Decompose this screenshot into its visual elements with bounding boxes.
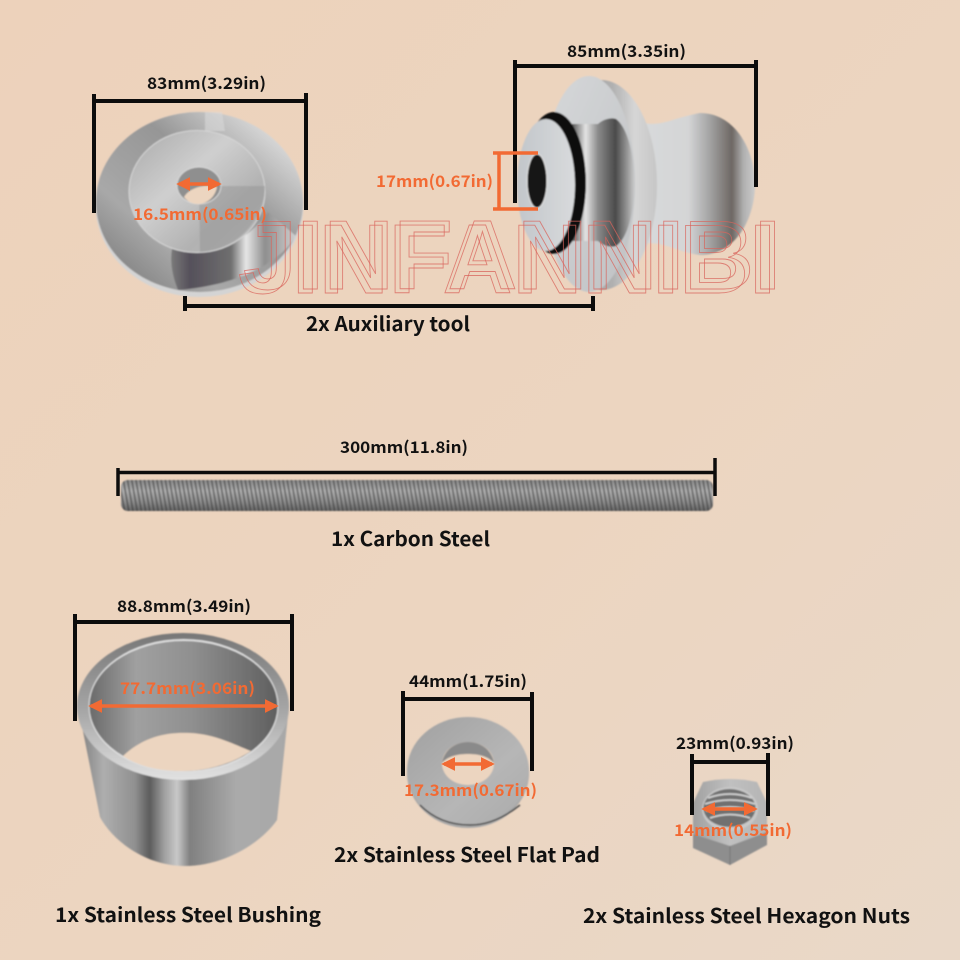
label: carbon steel: 1x Carbon Steel	[331, 523, 490, 552]
dimension: auxiliary tool span	[185, 296, 593, 311]
label: bushing: 1x Stainless Steel Bushing	[55, 899, 321, 928]
dimension: bushing outer	[75, 593, 292, 721]
panel: hexagon nut	[583, 730, 910, 929]
washer	[407, 717, 529, 828]
label: hexagon nuts: 2x Stainless Steel Hexagon Nuts	[583, 900, 910, 929]
dimension: disc outer width: 83mm(3.29in)	[147, 70, 266, 94]
label: auxiliary tool: 2x Auxiliary tool	[306, 308, 470, 337]
dimension: nut outer	[676, 730, 794, 816]
spool body	[517, 76, 755, 292]
dimension: washer outer	[403, 668, 532, 776]
panel: flat pad	[334, 668, 600, 868]
dimension: spool width: 85mm(3.35in)	[567, 38, 686, 62]
dimension: nut bore: 14mm(0.55in)	[674, 817, 792, 841]
dimension: nut outer: 23mm(0.93in)	[676, 730, 794, 754]
bushing body	[77, 633, 289, 866]
dimension: spool width	[515, 38, 756, 203]
dimension: bushing inner: 77.7mm(3.06in)	[120, 675, 255, 699]
panel: auxiliary tool disc	[94, 70, 306, 297]
watermark: JINFANNIBI	[243, 200, 781, 310]
watermark: JINFANNIBI	[238, 204, 776, 314]
dimension: rod length: 300mm(11.8in)	[340, 434, 468, 458]
panel: threaded rod	[118, 434, 715, 552]
label: flat pad: 2x Stainless Steel Flat Pad	[334, 839, 600, 868]
panel: auxiliary tool spool	[376, 38, 756, 292]
dimension: disc hole: 16.5mm(0.65in)	[133, 201, 267, 225]
nut	[693, 779, 767, 865]
panel: bushing	[55, 593, 321, 928]
disc body	[96, 112, 304, 297]
dimension: spool bore	[376, 153, 538, 209]
dimension: rod length	[118, 434, 715, 496]
dimension: disc hole	[133, 184, 267, 225]
dimension: spool bore: 17mm(0.67in)	[376, 168, 493, 192]
dimension: washer hole	[404, 764, 537, 801]
dimension: washer outer: 44mm(1.75in)	[409, 668, 527, 692]
rod	[121, 480, 713, 511]
dimension: bushing outer: 88.8mm(3.49in)	[117, 593, 251, 617]
dimension: disc outer width	[94, 70, 306, 213]
dimension: washer hole: 17.3mm(0.67in)	[404, 777, 537, 801]
